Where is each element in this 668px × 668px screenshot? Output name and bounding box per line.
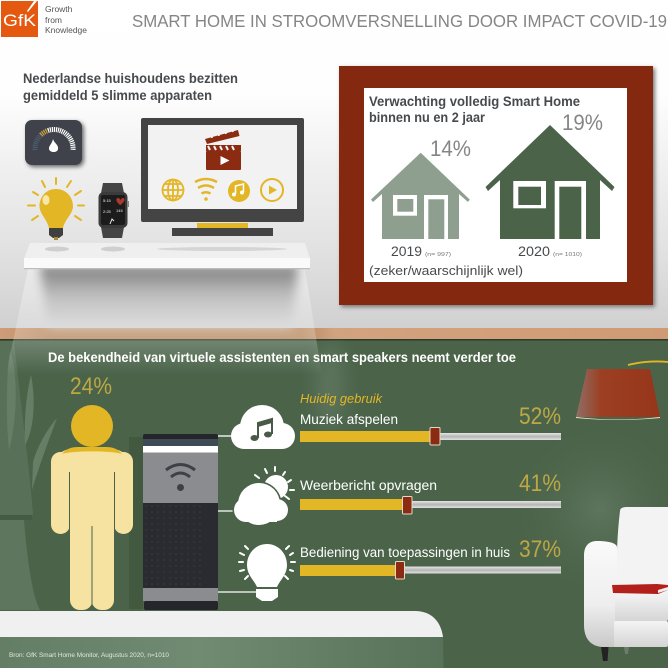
value 24%: 24% xyxy=(70,373,112,400)
value 19%: 19% xyxy=(562,110,603,135)
GfK logo: Growth xyxy=(45,4,73,14)
bar: weather: Weerbericht opvragen xyxy=(300,478,437,493)
table lower band xyxy=(0,637,444,668)
icon: smart watch: 145 xyxy=(116,208,123,213)
figure: person xyxy=(51,405,133,610)
house 2020 xyxy=(486,125,614,239)
year labels: (n= 997) xyxy=(425,252,451,258)
panel: smart home expectation xyxy=(339,66,655,307)
bar: music xyxy=(300,403,561,445)
icon: light bulb xyxy=(28,178,84,240)
icon: smart watch xyxy=(98,183,129,238)
icon: smart watch: 2:25 xyxy=(103,209,112,214)
plant xyxy=(0,341,57,610)
heading: virtual assistants: De bekendheid van virtuele assistenten en smart speakers neemt verder toe xyxy=(48,350,516,365)
panel heading: Verwachting volledig Smart Home xyxy=(369,94,580,109)
bar: music: Muziek afspelen xyxy=(300,412,398,427)
bar: home control: 37% xyxy=(519,536,561,563)
icon: white bulb xyxy=(239,544,295,601)
year labels: (n= 1010) xyxy=(553,252,582,258)
icon: film clapper xyxy=(205,128,241,170)
year labels xyxy=(369,244,582,278)
value 14%: 14% xyxy=(430,136,471,161)
icon: play xyxy=(261,179,283,201)
table top xyxy=(0,611,443,637)
year labels: 2019 xyxy=(391,244,422,259)
icon: globe xyxy=(162,180,184,200)
bar: home control: Bediening van toepassingen in huis xyxy=(300,545,510,560)
floor lamp xyxy=(576,361,668,420)
GfK logo xyxy=(1,1,87,37)
source: Bron: GfK Smart Home Monitor, Augustus 2020, n=1010 xyxy=(9,653,170,659)
book xyxy=(612,584,668,594)
year labels: 2020 xyxy=(518,244,550,259)
bar: weather xyxy=(300,470,561,514)
heading: devices: Nederlandse huishoudens bezitten xyxy=(23,71,238,86)
icon: smart watch: 5:15 xyxy=(103,198,112,203)
wooden floor strip xyxy=(0,328,668,339)
heading: devices xyxy=(23,71,238,103)
year labels: (zeker/waarschijnlijk wel) xyxy=(369,263,523,278)
icon: television xyxy=(141,118,304,236)
GfK logo: GfK xyxy=(3,12,36,30)
icon: cloud sun xyxy=(234,467,294,525)
icon: music xyxy=(228,180,250,202)
bar: weather: 41% xyxy=(519,470,561,497)
icon: thermostat gauge xyxy=(25,120,84,167)
bar: music: 52% xyxy=(519,403,561,430)
wall background xyxy=(0,0,668,330)
GfK logo: from xyxy=(45,15,62,25)
label: current use: Huidig gebruik xyxy=(300,391,383,406)
figure: smart speaker xyxy=(129,434,218,610)
wall light from lamp xyxy=(505,415,668,605)
house 2019 xyxy=(371,153,470,239)
panel: green room xyxy=(0,339,668,668)
connector lines xyxy=(218,436,258,592)
armchair xyxy=(584,507,668,661)
panel heading xyxy=(369,94,580,125)
panel heading: binnen nu en 2 jaar xyxy=(369,110,486,125)
icon: wifi xyxy=(195,179,217,201)
icon: cloud music xyxy=(231,405,295,449)
heading: devices: gemiddeld 5 slimme apparaten xyxy=(23,88,212,103)
icon: speaker wifi xyxy=(166,464,195,491)
bar: home control xyxy=(300,536,561,579)
GfK logo: Knowledge xyxy=(45,25,87,35)
shelf with shadow xyxy=(6,243,322,375)
